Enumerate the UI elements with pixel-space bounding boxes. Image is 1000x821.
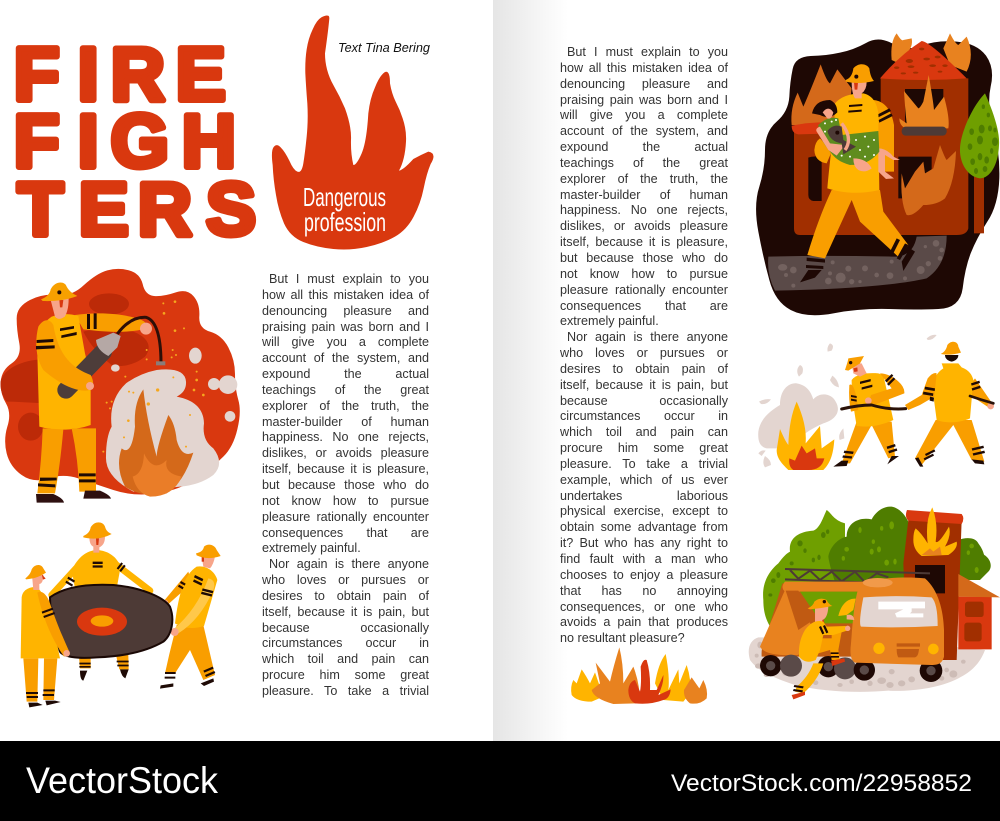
light green bush	[763, 510, 845, 633]
body text: left column: because occasionally	[262, 621, 429, 635]
body text: left column: procure him some great	[262, 668, 429, 682]
truck cab	[850, 578, 944, 665]
flame caption: profession	[304, 207, 386, 237]
byline: Text Tina Bering	[338, 41, 430, 55]
dark green bush	[828, 507, 908, 613]
outstretched arm	[75, 313, 147, 332]
title: Fire Fighters	[14, 32, 256, 251]
body text: right column: because occasionally	[560, 394, 728, 408]
body text: left column: But I must explain to you	[269, 272, 429, 286]
body text: right column: master-builder of human	[560, 188, 728, 202]
title: Fire Fighters: FIRE	[14, 32, 226, 116]
body text: right column: circumstances occur in	[560, 409, 728, 423]
body text: right column: itself, because it is pain, but	[560, 378, 728, 392]
hose	[117, 317, 161, 362]
illustration: two firefighters with hose	[758, 335, 994, 470]
road	[768, 236, 947, 291]
page gutter shadow	[493, 0, 568, 741]
body text: left column: account of the system, and	[262, 351, 429, 365]
body text: right column: pleasure. To take a trivial	[560, 457, 728, 471]
head and helmet	[51, 298, 69, 319]
flame caption: Dangerous	[303, 182, 386, 212]
burning house	[794, 78, 968, 235]
body text: left column: extremely painful.	[262, 541, 361, 555]
flames around the roof	[891, 33, 971, 72]
flame caption	[303, 182, 386, 237]
firefighters by truck	[792, 599, 856, 699]
watermark image id: VectorStock.com/22958852	[671, 770, 972, 797]
body text: left column: master-builder of human	[262, 415, 429, 429]
right bush	[958, 538, 991, 580]
red background blob	[1, 269, 240, 494]
dark background blob	[756, 39, 999, 315]
body text: left column: will give you a complete	[262, 335, 429, 349]
body text: left column: denouncing pleasure and	[262, 304, 429, 318]
legs and boots	[37, 428, 96, 493]
body text: right column: pleasure rationally encounter	[560, 283, 728, 297]
ladder	[785, 569, 930, 583]
right firefighter	[865, 342, 994, 467]
body text: right column: example, which of us ever	[560, 473, 728, 487]
body text: right column	[560, 45, 728, 645]
title: Fire Fighters: FIGH	[14, 99, 236, 183]
gravel ground	[749, 637, 985, 692]
body text: right column: Nor again is there anyone	[567, 330, 728, 344]
right firefighter	[160, 545, 221, 689]
body text: left column: circumstances occur in	[262, 636, 429, 650]
body text: left column: teachings of the great	[262, 383, 429, 397]
body text: right column: will give you a complete	[560, 108, 728, 122]
body text: right column: procure him some great	[560, 441, 728, 455]
body text: left column: which toil and pain can	[262, 652, 429, 666]
body text: right column: explorer of the truth, the	[560, 172, 728, 186]
body text: right column: chooses to enjoy a pleasure	[560, 568, 728, 582]
body text: right column: but because those who do	[560, 251, 728, 265]
body text: left column: itself, because it is pleasure,	[262, 462, 429, 476]
body text: left column: pleasure rationally encounter	[262, 510, 429, 524]
coat	[37, 314, 91, 430]
title: Fire Fighters: TERS	[18, 167, 256, 251]
body text: left column	[262, 272, 429, 698]
left firefighter	[21, 565, 70, 707]
windows	[808, 89, 943, 201]
illustration: firefighter rescuing a child from a burning house	[756, 33, 999, 315]
burning tower	[903, 520, 962, 660]
body text: left column: consequences that are	[262, 526, 429, 540]
body text: right column: praising pain was born and I	[560, 93, 728, 107]
body text: left column: not know how to pursue	[262, 494, 429, 508]
truck body	[762, 583, 858, 657]
body text: right column: But I must explain to you	[567, 45, 728, 59]
body text: right column: itself, because it is pleasure,	[560, 235, 728, 249]
body text: right column: denouncing pleasure and	[560, 77, 728, 91]
window flames	[899, 75, 949, 128]
flame badge	[272, 16, 433, 250]
child	[878, 148, 900, 179]
watermark bar	[0, 741, 1000, 821]
body text: left column: Nor again is there anyone	[269, 557, 429, 571]
body text: right column: teachings of the great	[560, 156, 728, 170]
darker patches	[1, 293, 149, 441]
illustration: firefighters holding rescue net	[21, 522, 221, 707]
rescue net	[50, 585, 172, 658]
illustration: fire truck and burning building	[749, 507, 1000, 699]
illustration: row of flames	[571, 647, 707, 704]
body text: right column: happiness. No one rejects,	[560, 203, 728, 217]
body text: left column: itself, because it is pain, but	[262, 605, 429, 619]
fire	[119, 389, 193, 495]
body text: left column: happiness. No one rejects,	[262, 430, 429, 444]
arm holding extinguisher	[36, 320, 93, 391]
body text: right column: obtain some advantage from	[560, 520, 728, 534]
body text: right column: expound the actual	[560, 140, 728, 154]
wheels	[760, 655, 942, 682]
body text: left column: dislikes, or avoids pleasure	[262, 446, 429, 460]
body text: right column: how all this mistaken idea of	[560, 61, 728, 75]
body text: right column: that has no annoying	[560, 584, 728, 598]
smoke cloud	[758, 383, 838, 448]
body text: right column: undertakes laborious	[560, 489, 728, 503]
body text: right column: not know how to pursue	[560, 267, 728, 281]
body text: left column: explorer of the truth, the	[262, 399, 429, 413]
hose	[842, 405, 906, 409]
body text: right column: dislikes, or avoids pleasure	[560, 219, 728, 233]
body text: right column: avoids a pain that produces	[560, 615, 728, 629]
body text: right column: who loves or pursues or	[560, 346, 728, 360]
extinguisher	[66, 352, 103, 390]
body text: right column: find fault with a man who	[560, 552, 728, 566]
body text: right column: consequences, or one who	[560, 600, 728, 614]
greenery seen under ladder	[800, 592, 858, 623]
side house	[958, 597, 992, 649]
body text: right column: physical exercise, except to	[560, 504, 728, 518]
watermark logo text: VectorStock	[26, 760, 218, 801]
body text: left column: pleasure. To take a trivial	[262, 684, 429, 698]
body text: right column: consequences that are	[560, 298, 728, 312]
body text: left column: praising pain was born and I	[262, 320, 429, 334]
body text: right column: account of the system, and	[560, 124, 728, 138]
fire	[777, 402, 834, 470]
illustration: firefighter with extinguisher	[1, 269, 240, 503]
smoke droplets	[758, 335, 937, 467]
body text: right column: extremely painful.	[560, 314, 659, 328]
body text: left column: who loves or pursues or	[262, 573, 429, 587]
body text: left column: desires to obtain pain of	[262, 589, 429, 603]
body text: right column: desires to obtain pain of	[560, 362, 728, 376]
body text: right column: no resultant pleasure?	[560, 631, 685, 645]
body text: left column: how all this mistaken idea of	[262, 288, 429, 302]
firefighter carrying child	[800, 64, 915, 282]
body text: left column: expound the actual	[262, 367, 429, 381]
sparks	[102, 300, 205, 453]
left firefighter	[833, 356, 904, 467]
body text: left column: but because those who do	[262, 478, 429, 492]
body text: right column: it? But who has any right to	[560, 536, 728, 550]
body text: right column: which toil and pain can	[560, 425, 728, 439]
top firefighter	[52, 522, 150, 681]
smoke cloud	[106, 348, 237, 492]
tree	[974, 175, 984, 233]
